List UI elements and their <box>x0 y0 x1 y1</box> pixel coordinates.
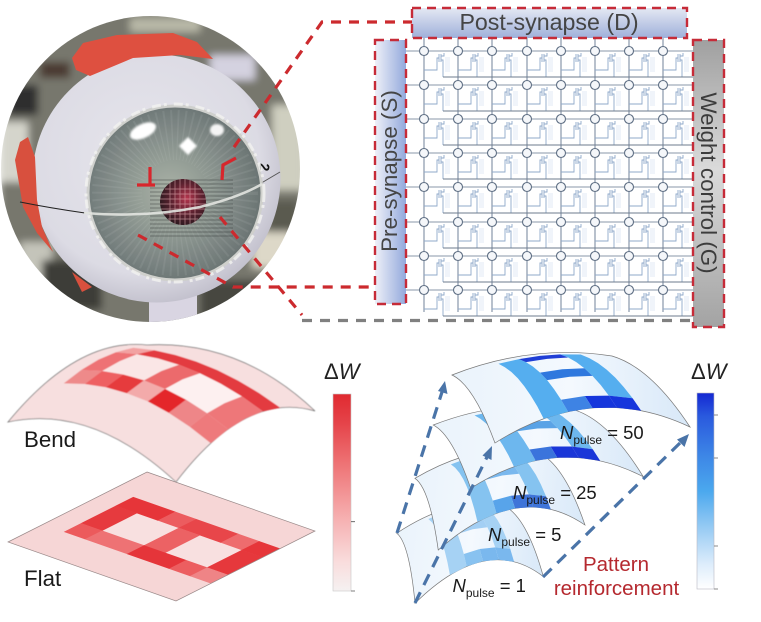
label: Npulse 5: pulse <box>501 535 530 549</box>
blue colorbar <box>697 393 718 589</box>
pre-synapse bar: Pre-synapse (S) <box>377 90 402 252</box>
gray dashed line <box>302 319 692 322</box>
label: Flat: Flat <box>24 566 62 591</box>
red delta W heading: ΔW <box>324 359 362 384</box>
label: Npulse 1: N <box>452 575 466 596</box>
pre-synapse bar <box>375 40 406 304</box>
label: Npulse 5: N <box>488 524 502 545</box>
label: Npulse 50: N <box>560 422 574 443</box>
crossbar circuit <box>406 38 693 316</box>
label: Npulse 25: = 25 <box>555 482 597 503</box>
label: Npulse 5: = 5 <box>530 524 561 545</box>
panel: eye photograph <box>0 10 305 330</box>
surface: Npulse 1 <box>387 498 554 605</box>
weight control bar: Weight control (G) <box>696 92 721 274</box>
equator line <box>20 202 85 213</box>
surface: Npulse 50 <box>452 352 690 443</box>
left muscle <box>15 137 53 252</box>
heatmap: flat <box>8 472 315 601</box>
red colorbar <box>333 394 355 591</box>
blue delta W heading: ΔW <box>691 359 729 384</box>
label: Npulse 25: N <box>513 482 527 503</box>
eye stand <box>149 296 197 322</box>
red markers on eye <box>137 158 236 185</box>
lens <box>86 104 264 282</box>
photo background <box>0 10 305 330</box>
label: pattern reinforcement: Pattern <box>583 553 649 576</box>
flat heatmap outline <box>8 472 315 601</box>
top muscle <box>72 33 213 76</box>
heatmap: bend <box>8 344 315 482</box>
lower muscle <box>72 272 92 292</box>
label: Bend: Bend <box>24 427 76 452</box>
weight control bar <box>693 40 724 327</box>
label: Npulse 1: pulse <box>466 586 495 600</box>
post-synapse bar <box>412 8 687 38</box>
sphere <box>32 54 280 302</box>
surface: Npulse 25 <box>433 404 644 491</box>
microscale array lines <box>150 180 233 236</box>
label: Npulse 50: pulse <box>573 433 602 447</box>
label: Npulse 50: = 50 <box>602 422 644 443</box>
film crease <box>84 184 262 215</box>
post-synapse bar: Post-synapse (D) <box>459 9 639 35</box>
label: Npulse 25: pulse <box>526 493 555 507</box>
label: pattern reinforcement: reinforcement <box>554 577 679 600</box>
surface: Npulse 5 <box>406 445 594 552</box>
callout lines from eye to array <box>138 22 692 320</box>
pupil <box>160 179 206 225</box>
arrows: pattern growth <box>397 381 689 603</box>
number 2 on eye: 2 <box>256 163 273 172</box>
label: Npulse 1: = 1 <box>495 575 526 596</box>
